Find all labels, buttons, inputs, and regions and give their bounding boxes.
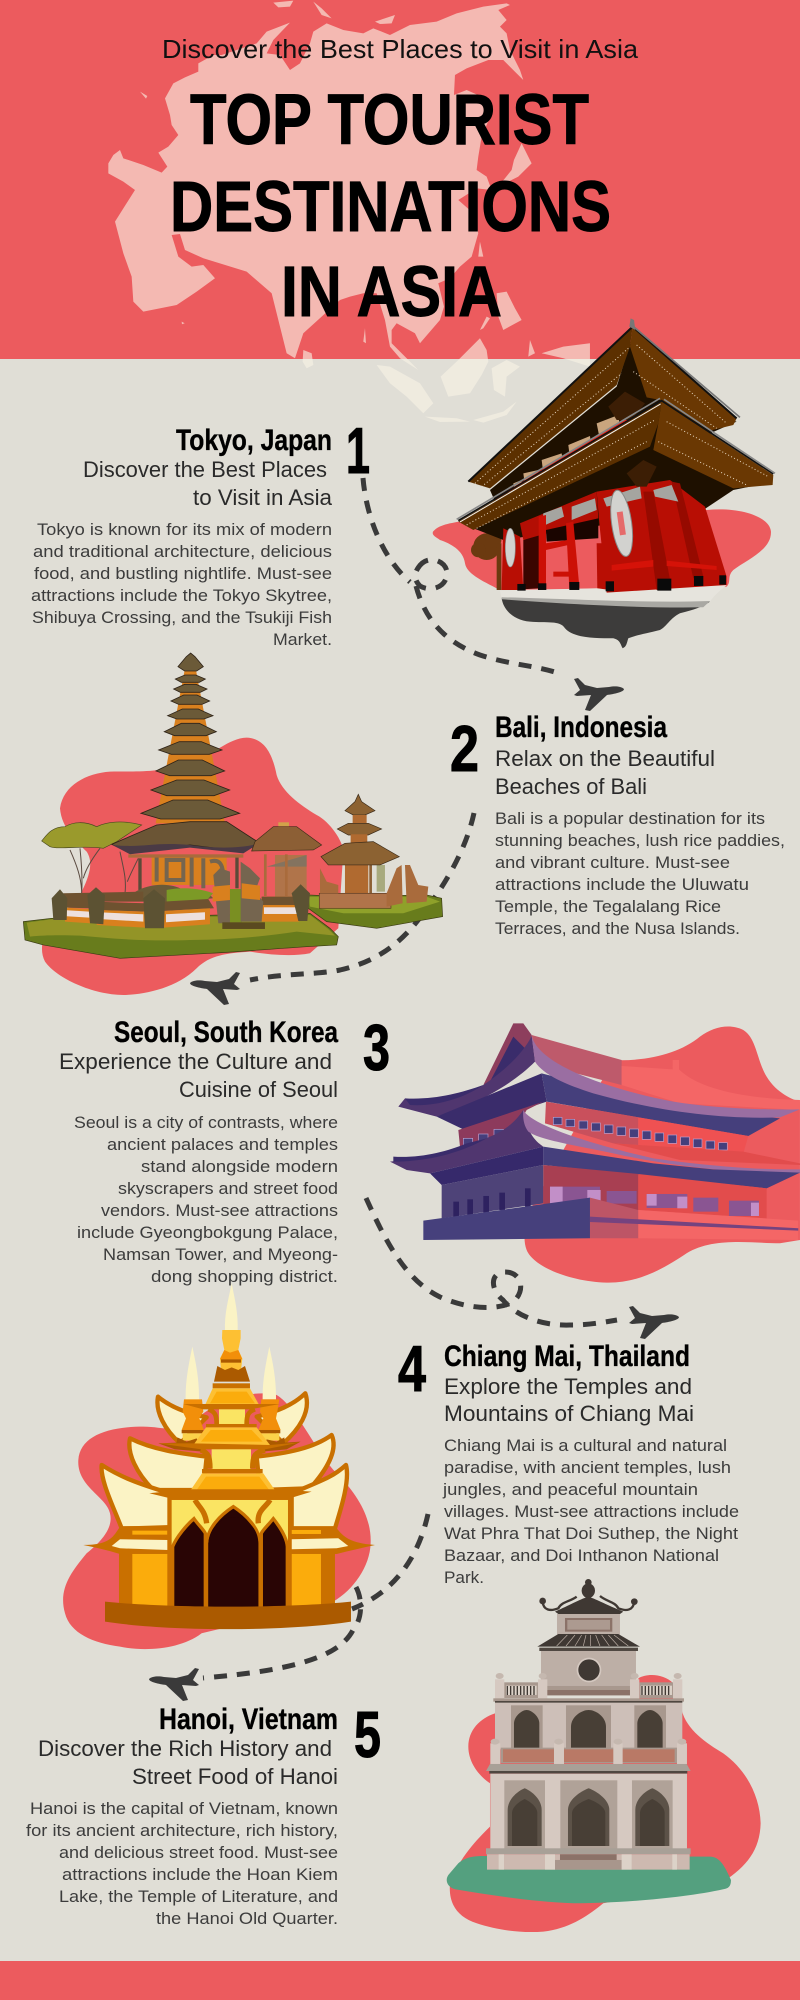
side pavilion xyxy=(252,822,322,897)
subheading: Seoul: Experience the Culture and xyxy=(59,1049,332,1074)
lower crest xyxy=(627,460,657,487)
front panel xyxy=(167,1495,292,1608)
main island xyxy=(23,913,338,958)
section 1: Tokyo xyxy=(31,414,370,649)
description: Hanoi: Lake, the Temple of Literature, and xyxy=(59,1887,338,1906)
stem of pagoda xyxy=(156,668,225,823)
description: Hanoi: attractions include the Hoan Kiem xyxy=(62,1865,338,1884)
description: Hanoi: the Hanoi Old Quarter. xyxy=(156,1909,338,1928)
red blob xyxy=(42,738,343,995)
right island xyxy=(308,895,443,928)
section 5: Hanoi xyxy=(26,1698,381,1928)
upper floor details xyxy=(513,415,620,492)
header band xyxy=(0,0,800,359)
number 1: 1 xyxy=(346,414,370,487)
icon: plane 1 xyxy=(574,678,624,711)
description: Chiang Mai: Park. xyxy=(444,1568,484,1587)
description: Chiang Mai: villages. Must-see attractions include xyxy=(444,1502,739,1521)
description: Bali: attractions include the Uluwatu xyxy=(495,875,749,894)
description: Tokyo: Market. xyxy=(273,630,332,649)
main roof xyxy=(112,822,260,853)
description: Chiang Mai xyxy=(442,1436,739,1587)
description: Chiang Mai: paradise, with ancient temples, lush xyxy=(444,1458,731,1477)
description: Bali: stunning beaches, lush rice paddies, xyxy=(495,831,785,850)
subheading: Hanoi xyxy=(38,1736,338,1789)
subheading: Bali: Relax on the Beautiful xyxy=(495,746,715,771)
subtitle: Discover the Best Places to Visit in Asia xyxy=(162,34,639,64)
description: Bali: Bali is a popular destination for its xyxy=(495,809,765,828)
side spires xyxy=(158,1347,301,1452)
lower walls xyxy=(442,1165,543,1218)
red blob xyxy=(450,1675,761,1932)
description: Hanoi xyxy=(26,1799,338,1928)
illustration: Hanoi tower xyxy=(447,1579,761,1932)
green lawn xyxy=(447,1856,731,1903)
map of Asia xyxy=(108,1,590,423)
upper roof front band xyxy=(532,1036,800,1118)
heading: Hanoi: Hanoi, Vietnam xyxy=(159,1703,338,1736)
icon: plane 2 xyxy=(190,972,240,1005)
illustration: Chiang Mai temple xyxy=(63,1283,375,1649)
subheading: Tokyo: Discover the Best Places xyxy=(83,457,327,482)
subheading: Bali: Beaches of Bali xyxy=(495,774,647,799)
dashed flight path 1 xyxy=(363,478,561,674)
description: Bali: Terraces, and the Nusa Islands. xyxy=(495,919,740,938)
dashed flight path 2 xyxy=(250,813,474,980)
description: Chiang Mai: jungles, and peaceful mountain xyxy=(442,1480,698,1499)
upper roof left wing xyxy=(398,1036,535,1117)
lower pillars xyxy=(119,1552,172,1607)
pagoda tiers xyxy=(141,653,240,819)
cream wings xyxy=(102,1393,347,1528)
description: Seoul: include Gyeongbokgung Palace, xyxy=(77,1223,338,1242)
central spire xyxy=(149,1283,312,1498)
upper storey xyxy=(490,1698,687,1764)
description: Seoul: Seoul is a city of contrasts, where xyxy=(74,1113,338,1132)
subheading: Chiang Mai xyxy=(444,1374,694,1426)
description: Bali: and vibrant culture. Must-see xyxy=(495,853,730,872)
illustration: Tokyo temple xyxy=(433,318,775,648)
description: Tokyo: Shibuya Crossing, and the Tsukiji Fish xyxy=(32,608,332,627)
subheading: Seoul: Cuisine of Seoul xyxy=(179,1077,338,1102)
number 2: 2 xyxy=(450,712,479,785)
lower storey xyxy=(486,1764,691,1850)
subheading: Chiang Mai: Mountains of Chiang Mai xyxy=(444,1401,694,1426)
description: Chiang Mai: Bazaar, and Doi Inthanon National xyxy=(444,1546,719,1565)
illustration: Bali temple xyxy=(23,653,443,995)
tower second roof xyxy=(537,1634,640,1651)
description: Tokyo: and traditional architecture, delicious xyxy=(33,542,332,561)
description: Seoul xyxy=(74,1113,338,1286)
title: IN ASIA xyxy=(281,253,502,332)
title: TOP TOURIST xyxy=(190,81,589,160)
lower eaves xyxy=(83,1525,170,1555)
number 5: 5 xyxy=(354,1698,381,1771)
description: Bali: Temple, the Tegalalang Rice xyxy=(495,897,721,916)
lower roof underside xyxy=(430,1147,543,1185)
description: Seoul: stand alongside modern xyxy=(141,1157,338,1176)
arched doors xyxy=(173,1507,287,1608)
lower roof xyxy=(390,1110,543,1173)
low orange wall xyxy=(52,884,310,928)
balcony left and right xyxy=(495,1673,682,1699)
trees xyxy=(42,822,142,893)
central gates xyxy=(213,862,265,929)
description: Seoul: skyscrapers and street food xyxy=(118,1179,338,1198)
description: Bali xyxy=(495,809,785,938)
red blob xyxy=(525,1027,800,1283)
upper walls xyxy=(458,1102,543,1147)
dashed flight path 3 xyxy=(366,1198,617,1325)
tower roof top xyxy=(539,1579,638,1635)
number 3: 3 xyxy=(363,1011,390,1084)
red blob xyxy=(63,1393,371,1649)
footer band xyxy=(0,1961,800,2000)
back gable xyxy=(483,1023,535,1085)
description: Tokyo xyxy=(31,520,332,649)
upper crest xyxy=(608,392,645,420)
description: Tokyo: Tokyo is known for its mix of modern xyxy=(37,520,332,539)
description: Hanoi: for its ancient architecture, rich history, xyxy=(26,1821,338,1840)
illustration: Seoul palace xyxy=(390,1023,800,1283)
subheading: Seoul xyxy=(59,1049,338,1102)
heading: Tokyo: Tokyo, Japan xyxy=(176,424,332,457)
subheading: Tokyo xyxy=(83,457,333,510)
title: DESTINATIONS xyxy=(170,168,611,247)
description: Chiang Mai: Chiang Mai is a cultural and natural xyxy=(444,1436,727,1455)
number 4: 4 xyxy=(398,1332,426,1405)
title xyxy=(170,81,611,332)
eave underside xyxy=(437,1073,547,1129)
section 4: Chiang Mai xyxy=(398,1332,739,1587)
subheading: Hanoi: Street Food of Hanoi xyxy=(132,1764,338,1789)
description: Seoul: dong shopping district. xyxy=(151,1267,338,1286)
description: Hanoi: and delicious street food. Must-see xyxy=(59,1843,338,1862)
heading: Seoul: Seoul, South Korea xyxy=(114,1016,338,1049)
heading: Bali: Bali, Indonesia xyxy=(495,711,667,744)
clock storey xyxy=(541,1651,636,1695)
tower base xyxy=(486,1848,691,1870)
dark eaves xyxy=(473,343,767,540)
icon: plane 3 xyxy=(629,1306,679,1339)
section 3: Seoul xyxy=(59,1011,390,1286)
description: Hanoi: Hanoi is the capital of Vietnam, known xyxy=(30,1799,338,1818)
stone platform xyxy=(500,585,727,603)
description: Chiang Mai: Wat Phra That Doi Suthep, the Night xyxy=(444,1524,738,1543)
base xyxy=(105,1602,351,1629)
description: Seoul: vendors. Must-see attractions xyxy=(101,1201,338,1220)
subheading: Hanoi: Discover the Rich History and xyxy=(38,1736,332,1761)
description: Tokyo: attractions include the Tokyo Skytree, xyxy=(31,586,332,605)
tree xyxy=(471,532,501,590)
description: Seoul: ancient palaces and temples xyxy=(107,1135,338,1154)
subheading: Bali xyxy=(495,746,715,799)
upper roof xyxy=(468,327,633,488)
stone base xyxy=(423,1198,590,1240)
lanterns xyxy=(505,489,636,567)
subheading: Tokyo: to Visit in Asia xyxy=(193,485,333,510)
main hall xyxy=(128,854,243,890)
heading: Chiang Mai: Chiang Mai, Thailand xyxy=(444,1340,690,1373)
section 2: Bali xyxy=(450,711,785,938)
back roof xyxy=(532,1035,622,1085)
description: Tokyo: food, and bustling nightlife. Must-see xyxy=(34,564,332,583)
floating rock shadow xyxy=(502,598,710,648)
dashed flight path 4 xyxy=(203,1514,428,1678)
lower red building xyxy=(597,480,727,593)
description: Seoul: Namsan Tower, and Myeong- xyxy=(103,1245,338,1264)
red blob xyxy=(433,509,771,590)
icon: plane 4 xyxy=(149,1668,199,1701)
lower roof xyxy=(458,402,662,530)
right pagoda xyxy=(319,794,428,908)
subheading: Chiang Mai: Explore the Temples and xyxy=(444,1374,692,1399)
